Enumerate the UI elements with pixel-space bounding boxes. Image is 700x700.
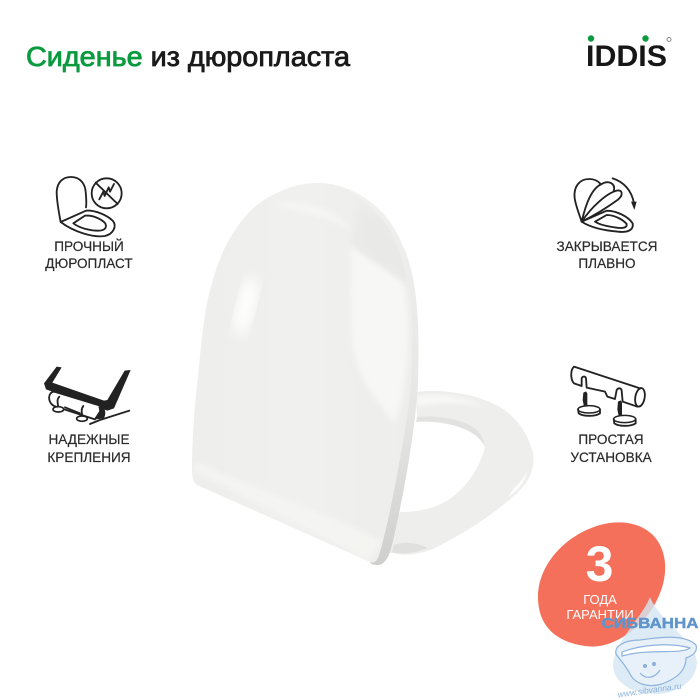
label: ПРОСТАЯ: [578, 432, 644, 447]
toilet seat product photo: [192, 183, 533, 565]
watermark name: СИБВАННА: [602, 615, 699, 632]
lid rim: [320, 183, 419, 565]
feature: soft close: ПЛАВНО: [578, 256, 636, 271]
icon: mounting bracket and screws: [571, 367, 646, 426]
watermark url: www.sibvanna.ru: [617, 681, 682, 699]
warranty badge: ГАРАНТИИ: [566, 607, 634, 622]
logo: iddis: IDDIS: [586, 40, 667, 73]
label: ПРОЧНЫЙ: [54, 239, 124, 254]
feature: reliable fixings: КРЕПЛЕНИЯ: [47, 450, 131, 465]
feature: simple installation: [570, 367, 653, 465]
lid face: [192, 183, 412, 563]
feature: simple installation: УСТАНОВКА: [570, 450, 653, 465]
title: Сиденье из дюропласта: [26, 41, 351, 72]
icon: closing lid with arrow: [574, 178, 637, 232]
icon: lid and seat with no-damage sign: [57, 177, 122, 236]
feature: durable duroplast: [45, 177, 133, 271]
lid highlights: [234, 254, 406, 416]
tub character: [616, 637, 696, 686]
label: НАДЕЖНЫЕ: [48, 432, 130, 447]
feature: reliable fixings: [44, 367, 131, 465]
warranty text: ГОДА: [583, 592, 617, 607]
drop: [613, 597, 697, 694]
warranty badge: [538, 522, 665, 647]
number 3: 3: [586, 536, 613, 592]
label: ЗАКРЫВАЕТСЯ: [557, 239, 657, 254]
badge blob: [538, 522, 665, 647]
watermark: sibvanna: [602, 597, 699, 699]
icon: hinge: [44, 367, 131, 424]
seat ring: [386, 391, 533, 555]
feature: soft close: [557, 178, 657, 271]
feature: durable duroplast: ДЮРОПЛАСТ: [45, 256, 133, 271]
